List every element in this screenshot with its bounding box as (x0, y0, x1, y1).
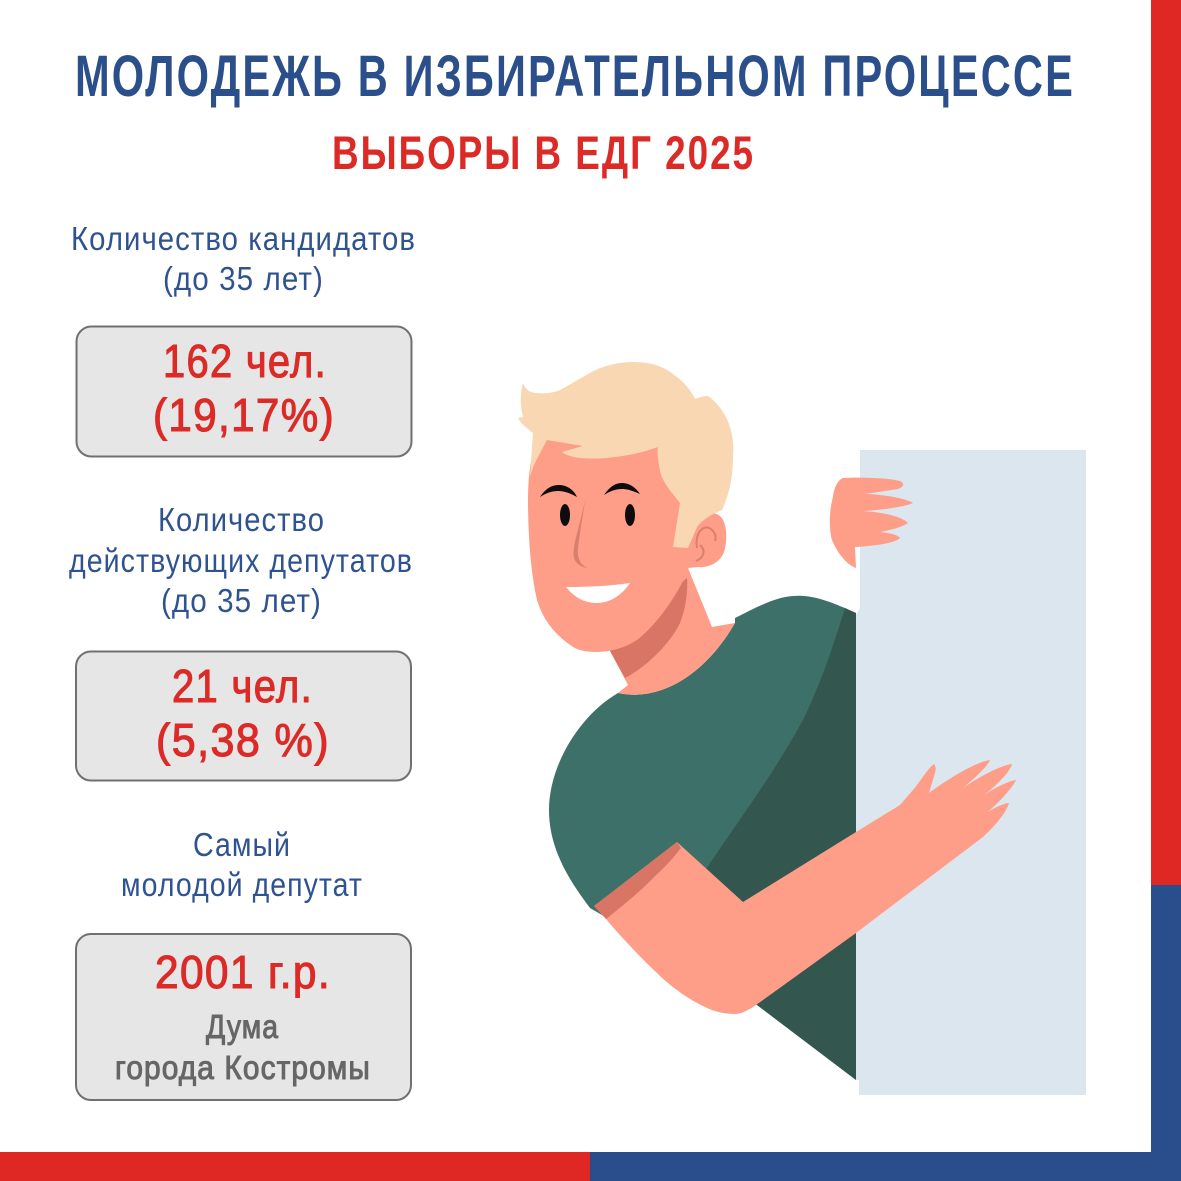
neck shadow (610, 578, 687, 678)
value box: 21 people (76, 652, 411, 780)
value box: born 2001: 2001 г.р. (155, 946, 331, 998)
board (856, 450, 1086, 1095)
neck (610, 568, 735, 695)
sleeve shadow (594, 842, 681, 919)
value box: 162 people: 162 чел. (163, 335, 327, 387)
ear (688, 513, 726, 568)
heading: youngest deputy: молодой депутат (121, 866, 363, 903)
heading: deputies: (до 35 лет) (161, 582, 322, 619)
heading: candidates: (до 35 лет) (163, 260, 324, 297)
face (528, 430, 692, 652)
heading: youngest deputy (121, 826, 363, 903)
shirt (549, 596, 856, 1080)
smile (566, 583, 630, 603)
subtitle: ВЫБОРЫ В ЕДГ 2025 (332, 126, 755, 179)
shirt shadow (690, 608, 856, 1080)
heading: candidates: Количество кандидатов (71, 220, 416, 257)
heading: candidates (71, 220, 416, 297)
value box: 162 people: (19,17%) (153, 389, 335, 441)
value box: born 2001: города Костромы (115, 1049, 371, 1086)
arm and lower hand (594, 760, 1016, 1014)
panel: youngest deputy (76, 826, 411, 1100)
illustration: young man behind a board (518, 362, 1086, 1095)
value box: 21 people: 21 чел. (172, 660, 313, 712)
upper hand (830, 478, 913, 568)
panel: candidates (71, 220, 416, 456)
nose (573, 500, 588, 568)
heading: youngest deputy: Самый (193, 826, 291, 863)
hair (518, 362, 733, 548)
panel: deputies (69, 501, 413, 780)
eyebrows (540, 483, 640, 497)
eyes (560, 504, 635, 526)
heading: deputies (69, 501, 413, 619)
heading: deputies: действующих депутатов (69, 542, 413, 579)
value box: born 2001: Дума (206, 1008, 279, 1045)
heading: deputies: Количество (158, 501, 325, 538)
value box: 21 people: (5,38 %) (156, 714, 330, 766)
value box: born 2001 (76, 934, 411, 1100)
value box: 162 people (76, 326, 412, 456)
